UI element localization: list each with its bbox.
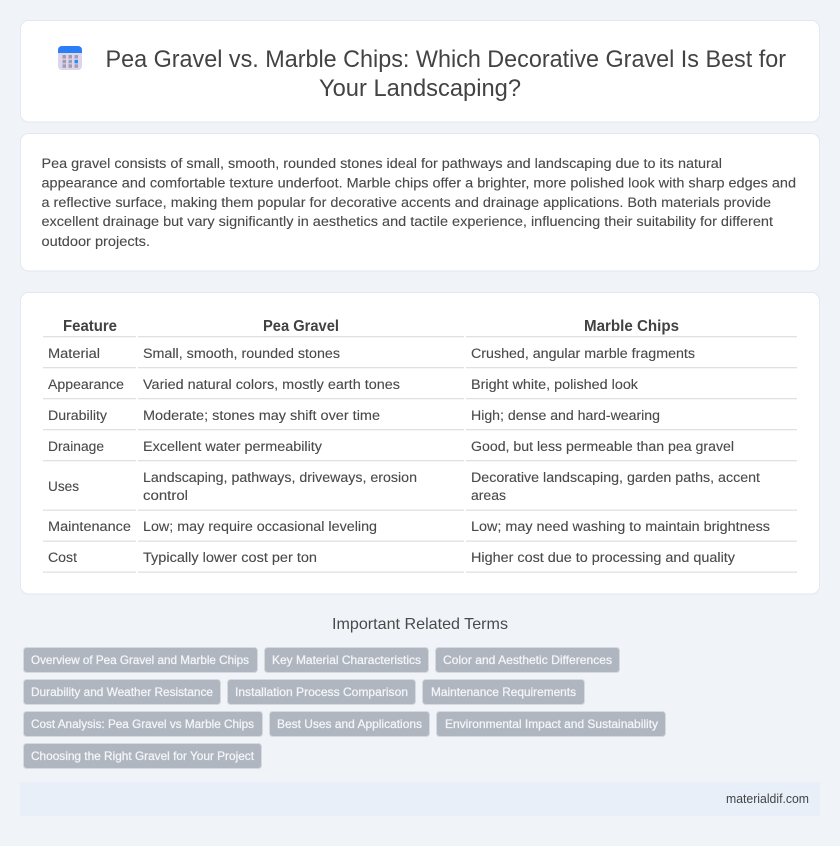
row: maintenance — [48, 519, 770, 535]
tag: maintenance requirements: Maintenance Requirements — [431, 685, 576, 699]
tag: cost analysis: Cost Analysis: Pea Gravel vs Marble Chips — [31, 717, 254, 731]
tag: environmental impact and sustainability: Environmental Impact and Sustainability — [445, 717, 658, 731]
tag: choosing the right gravel: Choosing the Right Gravel for Your Project — [31, 749, 255, 763]
tag: best uses and applications — [270, 712, 430, 736]
tag: best uses and applications: Best Uses and Applications — [277, 717, 422, 731]
row: material — [48, 346, 695, 362]
tag: overview — [24, 648, 258, 672]
title: Pea Gravel vs. Marble Chips: Which Decorative Gravel Is Best for — [106, 46, 786, 73]
paragraph text — [42, 156, 796, 250]
table header row — [63, 318, 679, 335]
row: cost: Higher cost due to processing and quality — [471, 550, 736, 566]
table header row: Feature — [63, 318, 117, 335]
row: drainage: Good, but less permeable than pea gravel — [471, 439, 734, 455]
row: maintenance: Low; may need washing to maintain brightness — [471, 519, 770, 535]
row: appearance: Varied natural colors, mostly earth tones — [143, 377, 400, 393]
row: appearance: Appearance — [48, 377, 124, 393]
row: material: Small, smooth, rounded stones — [143, 346, 340, 362]
tag: color and aesthetic differences: Color and Aesthetic Differences — [443, 653, 612, 667]
row: durability: High; dense and hard-wearing — [471, 408, 660, 424]
row: cost: Typically lower cost per ton — [143, 550, 317, 566]
row: durability: Moderate; stones may shift over time — [143, 408, 380, 424]
panel: introduction paragraph — [20, 134, 820, 271]
panel: comparison table — [20, 292, 820, 594]
footer bar: materialdif.com — [726, 792, 809, 806]
row: drainage: Excellent water permeability — [143, 439, 323, 455]
panel: related term tags — [24, 648, 666, 768]
tag: choosing the right gravel — [24, 744, 262, 768]
row: uses: control — [143, 488, 188, 504]
paragraph text: excellent drainage but vary significantly in aesthetics and tactile experience, influencing their suitability for different — [42, 214, 773, 230]
row: maintenance: Maintenance — [48, 519, 131, 535]
title: Your Landscaping? — [319, 75, 521, 102]
row: uses: areas — [471, 488, 506, 504]
heading: important related terms: Important Related Terms — [332, 616, 508, 633]
row: uses: Landscaping, pathways, driveways, erosion — [143, 470, 417, 486]
footer bar — [20, 782, 820, 816]
tag: installation process comparison: Installation Process Comparison — [235, 685, 408, 699]
table header row: Pea Gravel — [263, 318, 339, 335]
tag: environmental impact and sustainability — [436, 712, 666, 736]
row: material: Crushed, angular marble fragments — [471, 346, 695, 362]
row: durability: Durability — [48, 408, 108, 424]
tag: color and aesthetic differences — [436, 648, 620, 672]
tag: installation process comparison — [228, 680, 416, 704]
row: drainage: Drainage — [48, 439, 104, 455]
tag: cost analysis — [24, 712, 262, 736]
row: durability — [48, 408, 660, 424]
row: uses — [48, 470, 760, 504]
table header row: Marble Chips — [584, 318, 679, 335]
paragraph text: a reflective surface, making them popular for decorative accents and drainage applications. Both materials provide — [42, 195, 771, 211]
row: cost: Cost — [48, 550, 77, 566]
panel: title header — [20, 20, 820, 122]
row: material: Material — [48, 346, 100, 362]
row: cost — [48, 550, 736, 566]
tag: durability and weather resistance: Durability and Weather Resistance — [31, 685, 213, 699]
row: appearance — [48, 377, 639, 393]
row: maintenance: Low; may require occasional leveling — [143, 519, 377, 535]
icon: calendar — [58, 46, 82, 70]
row: appearance: Bright white, polished look — [471, 377, 639, 393]
tag: key material characteristics — [264, 648, 428, 672]
title — [106, 46, 786, 102]
row: drainage — [48, 439, 734, 455]
row: uses: Uses — [48, 479, 79, 495]
tag: maintenance requirements — [422, 680, 584, 704]
tag: overview: Overview of Pea Gravel and Marble Chips — [31, 653, 249, 667]
paragraph text: Pea gravel consists of small, smooth, rounded stones ideal for pathways and landscaping due to its natural — [42, 156, 722, 172]
paragraph text: outdoor projects. — [42, 234, 150, 250]
tag: key material characteristics: Key Material Characteristics — [272, 653, 421, 667]
tag: durability and weather resistance — [24, 680, 220, 704]
row: uses: Decorative landscaping, garden paths, accent — [471, 470, 760, 486]
paragraph text: appearance and comfortable texture underfoot. Marble chips offer a brighter, more polished look with sharp edges and — [42, 176, 796, 192]
